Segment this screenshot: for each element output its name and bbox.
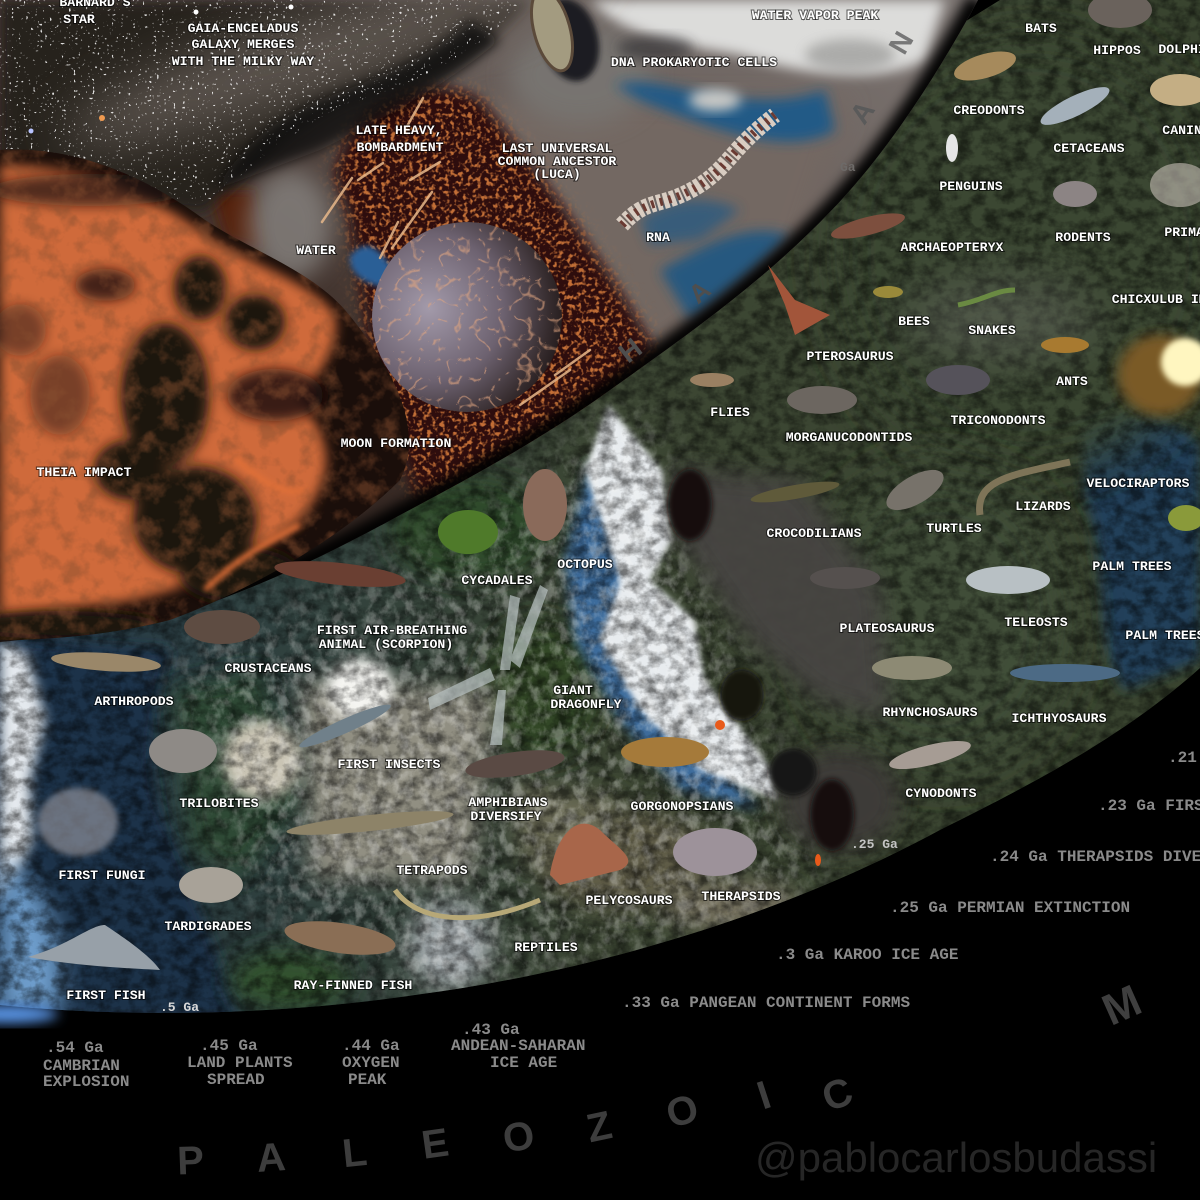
timeline labels: .5 Ga [160,1000,199,1015]
labels: Hadean and space events: GALAXY MERGES [192,37,295,52]
animal: triconodont [926,365,990,395]
animal: rodent [1053,181,1097,207]
lava fields [335,86,655,500]
labels: Hadean and space events: WATER VAPOR PEAK [752,8,878,23]
timeline labels: Ga [840,160,856,175]
animal: rhynchosaur [872,656,952,680]
grey dust clouds [248,170,332,280]
labels: Hadean and space events: LATE HEAVY, [355,123,443,138]
left ocean [26,645,237,1013]
animal: crustacean [184,610,260,644]
labels: life events [58,21,1200,1003]
timeline labels: .33 Ga PANGEAN CONTINENT FORMS [622,994,910,1012]
animal: bee [873,286,903,298]
creatures: Phanerozoic animals [28,0,1200,970]
era lettering: Paleozoic: L [340,1130,369,1176]
animal: crocodilian [749,477,841,507]
timeline labels: CAMBRIAN [43,1057,120,1075]
labels: life events: CROCODILIANS [767,526,862,541]
animal: lizard [980,462,1070,515]
Hadean era lettering: A [844,95,881,130]
labels: life events: ANIMAL (SCORPION) [319,637,453,652]
animal: therapsid [673,828,757,876]
pale mountain ranges [222,658,800,990]
labels: life events: PENGUINS [939,179,1003,194]
snow mountains centre [565,405,778,810]
labels: life events: MORGANUCODONTIDS [786,430,912,445]
animal: cynodont [887,735,973,775]
labels: life events: RAY-FINNED FISH [294,978,412,993]
animal: primate [1150,163,1200,207]
labels: life events: CYCADALES [461,573,533,588]
timeline labels: ICE AGE [490,1054,557,1072]
animal: snake [958,290,1015,305]
labels: life events: PALM TREES [1092,559,1172,574]
animal: morganucodontid [787,386,857,414]
animal: first fish [28,925,160,970]
animal: gorgonopsian [621,737,709,767]
labels: life events: TELEOSTS [1004,615,1068,630]
animal: pelycosaur [550,824,628,885]
green lowlands [1076,405,1170,476]
labels: life events: FIRST FUNGI [58,868,146,883]
labels: Hadean and space events: THEIA IMPACT [37,465,132,480]
labels: life events: VELOCIRAPTORS [1087,476,1190,491]
era lettering: Paleozoic: I [752,1073,776,1118]
labels: Hadean and space events: RNA [646,230,670,245]
labels: life events: SNAKES [968,323,1016,338]
labels: life events: CYNODONTS [905,786,977,801]
labels: life events: TRILOBITES [179,796,259,811]
labels: life events: FIRST AIR-BREATHING [317,623,467,638]
timeline labels: EXPLOSION [43,1073,129,1091]
labels: life events: TURTLES [926,521,982,536]
timeline labels [43,160,1200,1091]
timeline labels: .25 Ga PERMIAN EXTINCTION [890,899,1130,917]
labels: life events: CREODONTS [953,103,1025,118]
timeline labels: .44 Ga [342,1037,400,1055]
labels: life events: AMPHIBIANS [468,795,548,810]
panel: deep space [0,0,531,216]
era lettering: Paleozoic: O [661,1086,703,1137]
timeline labels: PEAK [348,1071,387,1089]
explosion: Chicxulub impact [1118,335,1200,415]
era lettering: Paleozoic: Z [583,1103,616,1151]
right sea [1080,410,1200,690]
labels: life events: ARTHROPODS [94,694,174,709]
labels: life events: ANTS [1056,374,1088,389]
dark continents on Theia [0,174,323,639]
labels: Hadean and space events: GAIA-ENCELADUS [188,21,298,36]
animal: tetrapod [286,806,454,840]
Hadean era lettering: H [613,332,648,369]
labels: life events: ICHTHYOSAURS [1012,711,1107,726]
labels: life events: FIRST FISH [66,988,146,1003]
labels: Hadean and space events: WITH THE MILKY WAY [172,54,314,69]
labels: life events: DRAGONFLY [550,697,622,712]
era lettering: Paleozoic: A [255,1135,287,1181]
labels: life events: THERAPSIDS [701,889,781,904]
animal: turtle-like reptile [880,462,950,518]
animal: ant [1041,337,1089,353]
animal: giant dragonfly [428,585,548,745]
era lettering: Paleozoic: E [419,1120,451,1168]
animal: amphibian [464,745,566,783]
timeline labels: .43 Ga [462,1021,520,1039]
Hadean era lettering [613,26,920,369]
timeline labels: SPREAD [207,1071,265,1089]
icon: cycad palm [438,510,498,554]
labels: Hadean and space events [37,0,878,480]
labels: life events: GIANT [553,683,593,698]
labels: Hadean and space events: BOMBARDMENT [356,140,444,155]
timeline labels: .3 Ga KAROO ICE AGE [776,946,958,964]
era lettering: Paleozoic: O [500,1113,538,1162]
timeline labels: LAND PLANTS [187,1054,293,1072]
labels: life events: PELYCOSAURS [585,893,673,908]
icon: Theia planet [0,145,430,645]
animal: ichthyosaur [1010,664,1120,682]
labels: life events: ARCHAEOPTERYX [901,240,1004,255]
labels: Hadean and space events: (LUCA) [533,167,581,182]
labels: Hadean and space events: MOON FORMATION [341,436,451,451]
era lettering: Paleozoic [176,1069,859,1183]
labels: life events: TRICONODONTS [951,413,1046,428]
meteors [322,98,590,405]
animal: teleost [966,566,1050,594]
animal: creodont [951,46,1019,86]
labels: life events: GORGONOPSIANS [631,799,734,814]
timeline labels: ANDEAN-SAHARAN [451,1037,585,1055]
animal: penguin [946,134,958,162]
volcanic smoke [668,280,1100,866]
timeline labels: OXYGEN [342,1054,400,1072]
animal: archaeopteryx [829,208,907,244]
labels: life events: DIVERSIFY [470,809,542,824]
labels: life events: BATS [1025,21,1057,36]
labels: life events: FIRST INSECTS [338,757,441,772]
animal: cetacean [1036,80,1114,132]
animal: first insect [296,699,394,753]
labels: life events: LIZARDS [1015,499,1071,514]
animal: canine [1150,74,1200,106]
labels: life events: TETRAPODS [396,863,468,878]
white polar coast [0,640,45,900]
icon: RNA strand [622,115,775,225]
animal: fly [690,373,734,387]
icon: prokaryotic cell [524,0,608,88]
dark rim [220,0,978,600]
era lettering: Paleozoic: P [176,1139,205,1183]
labels: life events: BEES [898,314,930,329]
labels: Hadean and space events: LAST UNIVERSAL [502,141,612,156]
panel: Hadean band [0,0,1000,650]
icon: Moon [372,222,562,412]
water [350,246,395,288]
animal: reptile [395,890,540,918]
animal: tardigrade [179,867,243,903]
animal: hippo [1088,0,1152,28]
animal: ray-finned fish [282,915,398,961]
labels: life events: PTEROSAURUS [806,349,894,364]
labels: life events: PLATEOSAURUS [840,621,935,636]
labels: life events: FLIES [710,405,750,420]
animal: pterosaurus [768,265,830,335]
icon: palm tree [1168,505,1200,531]
animal: octopus [523,469,567,541]
animal: trilobite [149,729,217,773]
labels: Hadean and space events: DNA PROKARYOTIC CELLS [611,55,777,70]
labels: life events: REPTILES [514,940,578,955]
timeline labels: .54 Ga [46,1039,104,1057]
brown hadean ground [498,104,790,344]
timeline labels: .45 Ga [200,1037,258,1055]
labels: Hadean and space events: STAR [63,12,95,27]
labels: Hadean and space events: COMMON ANCESTOR [498,154,616,169]
era lettering: Mesozoic: M [1095,976,1149,1035]
era lettering: Paleozoic: C [816,1069,859,1120]
blue atmosphere glow [0,860,62,1020]
labels: life events: HIPPOS [1093,43,1141,58]
Hadean era lettering: N [883,26,920,59]
watermark credit: @pablocarlosbudassi [755,1134,1157,1181]
animal: plateosaurus [810,567,880,589]
labels: life events: CRUSTACEANS [224,661,312,676]
labels: Hadean and space events: WATER [296,243,336,258]
labels: life events: OCTOPUS [557,557,613,572]
blue glow bottom left [0,1005,58,1023]
labels: life events: CETACEANS [1053,141,1125,156]
animal: arthropod [51,649,161,675]
labels: life events: TARDIGRADES [164,919,252,934]
Hadean era lettering: A [683,274,716,309]
labels: life events: RODENTS [1055,230,1111,245]
animal: scorpion [273,556,407,592]
timeline labels: .25 Ga [851,837,898,852]
icon: first fungi [38,788,118,856]
white clouds [590,0,945,111]
snow and rock texture [160,402,840,1000]
labels: life events: RHYNCHOSAURS [883,705,978,720]
